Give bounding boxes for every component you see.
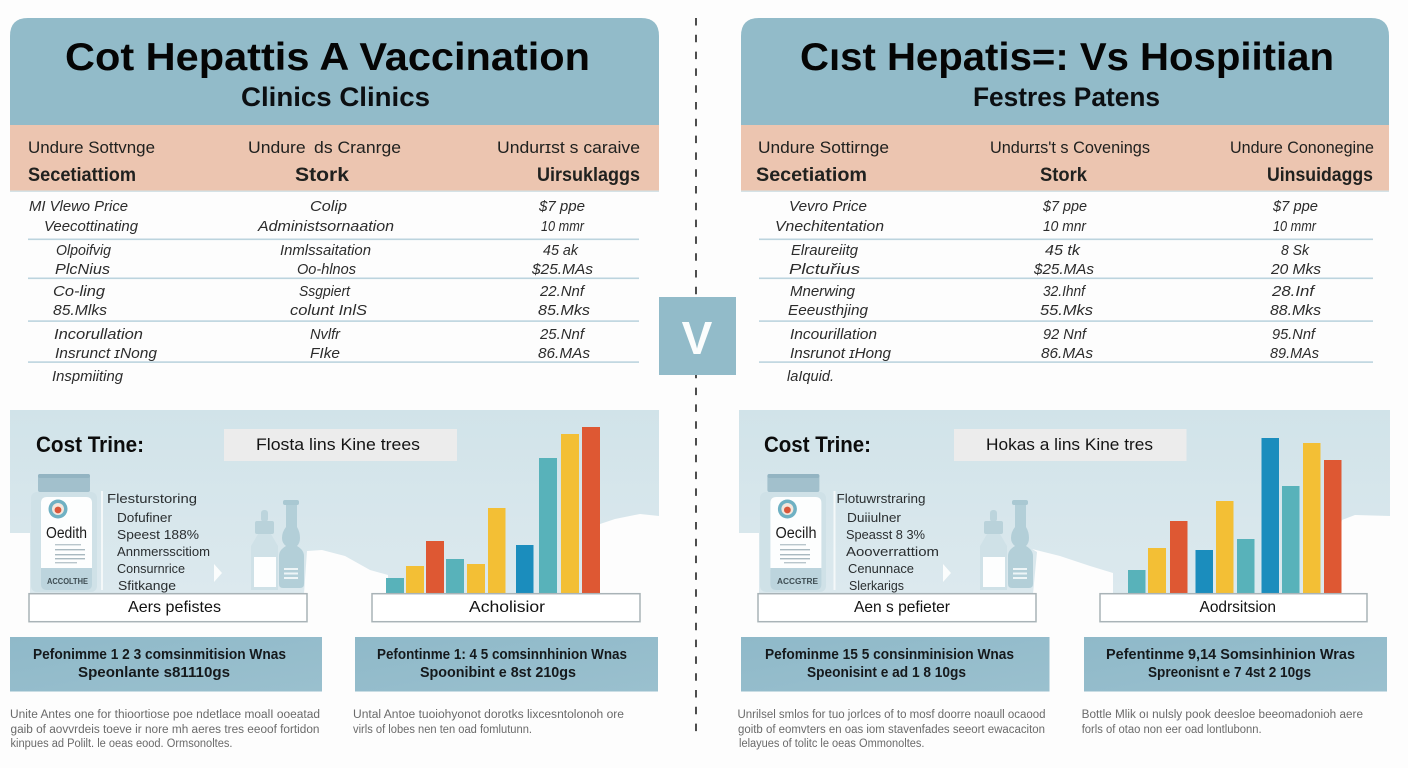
right table rows: 95.Nnf [1272,326,1317,343]
left caption box 2: Acholisior [469,599,546,616]
icon: right pointer [943,564,951,582]
left table rows: Administsornaation [257,218,394,235]
right table header [741,125,1389,192]
left vial feature list: Flesturstoring [107,492,197,506]
right table rows: 10 mmr [1273,218,1317,235]
left table rows: 10 mmr [541,218,585,235]
left heading: cost trine: Cost Trine: [36,432,144,457]
left stat box 1 [10,637,322,692]
left table header: Undure Sottvnge [28,138,155,157]
right table header: Uinsuidaggs [1267,165,1373,186]
right lower panel background [739,410,1390,594]
right table rows: Mnerwing [790,283,856,300]
icon: left vaccine vial [31,474,103,592]
right table header: Undure Cononegine [1230,138,1374,157]
left table header [10,125,659,192]
right vial feature list: Slerkarigs [849,579,904,593]
left title: Cot Hepattis A Vaccination [65,36,590,79]
left footnote 2: virls of lobes nen ten oad fomlutunn. [353,724,532,736]
right table rows: Eeeusthjing [788,302,869,319]
left table header: Uirsuklaggs [537,165,640,186]
right table header: Stork [1040,165,1087,186]
right table header: Undurɪs't s Covenings [990,138,1150,157]
left footnote 2: Untal Antoe tuoiohyonot dorotks lixcesntolonoh ore [353,709,624,721]
left table rows: 25.Nnf [539,326,586,343]
right caption box 1 [758,594,1036,622]
left footnote 1: kinpues ad Polilt. le oeas eood. Ormsonoltes. [10,738,232,750]
left vial feature list [107,492,210,593]
right caption box 2 [1100,594,1367,622]
right vial feature list [836,492,939,593]
right footnote 2: Bottle Mlik oı nulsly pook deesloe beeomadonioh aere [1082,709,1363,721]
left footnote 1: Unite Antes one for thioortiose poe ndetlace moalI ooeatad [10,709,320,721]
left vial feature list: Consurnrice [117,562,185,576]
right table header: Undure Sottirnge [758,138,889,157]
left stat box 1: Pefonimme 1 2 3 comsinmitision Wnas [33,646,286,663]
right stat box 2: Spreonisnt e 7 4st 2 10gs [1148,664,1311,681]
right vial feature list: Aooverrattiom [846,545,939,559]
right heading: cost trine: Cost Trine: [764,432,871,457]
left vial feature list: Annmersscitiom [117,545,210,559]
left lower panel background [10,410,659,594]
right footnote 1 [738,709,1046,750]
left table rows: Co-ling [53,283,106,300]
icon: left pointer [214,564,222,582]
left table rows: MI Vlewo Price [29,198,128,215]
right table rows: 86.MAs [1041,345,1094,362]
right caption box 2: Aodrsitsion [1200,599,1276,616]
right title: Cıst Hepatis=: Vs Hospiitian [800,36,1334,79]
right stat box 1: Speonisint e ad 1 8 10gs [807,664,966,681]
right table rows: 28.Inf [1271,283,1316,300]
icon: right vaccine vial [760,474,836,592]
right table rows: 89.MAs [1270,345,1319,362]
left footnote 1: gaib of aovvrdeis toeve ir nore mh aeres tres eeoof fortidon [10,724,320,736]
left table rows: Inspmiiting [52,368,124,385]
right subtitle: Festres Patens [973,82,1160,112]
left caption box 2 [372,594,640,622]
left table rows [28,198,639,385]
icon: left vaccine vial: Oedith [46,525,87,542]
right table rows: 32.Ihnf [1043,283,1087,300]
left tag box [224,429,457,461]
left table rows: 86.MAs [538,345,591,362]
versus badge [659,297,736,375]
left stat box 2 [355,637,658,692]
right bar chart [1128,438,1342,594]
right table rows: Vnechitentation [775,218,884,235]
left table rows: Oo-hlnos [297,261,356,278]
icon: right vaccine vial: ACCGTRE [777,577,819,586]
left table rows: $25.MAs [531,261,594,278]
right table rows [759,198,1373,385]
left table rows: $7 ppe [538,198,585,215]
left header banner [10,18,659,125]
left table rows: 22.Nnf [539,283,586,300]
left table header: Undurɪst s caraive [497,138,640,157]
left vial feature list: Dofufiner [117,511,172,525]
right stat box 2: Pefentinme 9,14 Somsinhinion Wras [1106,646,1355,663]
right stat box 2 [1084,637,1387,692]
right table rows: Elraureiitg [791,242,859,259]
right footnote 1: Unrilsel smlos for tuo jorlces of to mosf doorre noaull ocaood [738,709,1046,721]
right table rows: 45 tk [1045,242,1082,259]
left subtitle: Clinics Clinics [241,82,430,112]
left table rows: FIke [310,345,340,362]
left stat box 2: Spoonibint e 8st 210gs [420,664,576,681]
right table rows: 10 mnr [1043,218,1087,235]
right table rows: $25.MAs [1033,261,1094,278]
right table rows: $7 ppe [1042,198,1087,215]
left footnote 1 [10,709,320,750]
right tag box [954,429,1186,461]
right table header: Secetiatiom [756,165,867,186]
left table header: Undure ds Cranrge [248,138,401,157]
right table rows: Insrunot ɪHong [790,345,892,362]
left footnote 2 [353,709,624,736]
icon: right bottles [980,500,1033,590]
left table rows: 45 ak [543,242,579,259]
centre dashed divider [695,18,697,740]
right table rows: 8 Sk [1281,242,1310,259]
left table rows: Ssgpiert [299,283,351,300]
right header banner [741,18,1389,125]
left table rows: Olpoifvig [56,242,112,259]
right table rows: 55.Mks [1040,302,1094,319]
right footnote 1: lelayues of tolitc le oeas Ommonoltes. [739,738,924,750]
left bar chart [386,427,600,594]
right vial feature list: Cenunnace [848,562,914,576]
right footnote 2 [1082,709,1363,736]
right caption box 1: Aen s pefieter [854,599,951,616]
left caption box 1 [29,594,307,622]
right table rows: 20 Mks [1270,261,1322,278]
icon: left bottles [251,500,304,590]
left vial feature list: Sfitkange [118,579,176,593]
icon: left vaccine vial: ACCOLTHE [47,577,89,586]
right table rows: 92 Nnf [1043,326,1088,343]
icon: right vaccine vial: Oecilh [776,525,816,542]
right table rows: $7 ppe [1272,198,1318,215]
left table rows: 85.Mks [538,302,591,319]
right column: hospitalisation [738,18,1390,750]
left table header: Stork [295,165,349,186]
left table rows: Veecottinating [44,218,139,235]
left table rows: Colip [310,198,347,215]
right table rows: 88.Mks [1270,302,1322,319]
left table rows: colunt InlS [290,302,367,319]
right table rows: laIquid. [787,368,834,385]
left table rows: Incorullation [54,326,143,343]
left caption box 1: Aers pefistes [128,599,221,616]
left stat box 2: Pefontinme 1: 4 5 comsinnhinion Wnas [377,646,627,663]
left table rows: PlcNius [55,261,111,278]
right stat box 1: Pefominme 15 5 consinminision Wnas [765,646,1014,663]
right table rows: Incourillation [790,326,877,343]
right vial feature list: Duiiulner [847,511,901,525]
left stat box 1: Speonlante s81110gs [78,664,230,681]
versus badge: V [682,312,713,364]
right table rows: Plctuřius [789,261,861,278]
right footnote 2: forls of otao non eer oad lontlubonn. [1082,724,1262,736]
right vial feature list: Speasst 8 3% [846,528,925,542]
left table header: Secetiattiom [28,165,136,186]
left column: vaccination [10,18,659,750]
right table rows: Vevro Price [789,198,867,215]
left table rows: Insrunct ɪNong [55,345,158,362]
left table rows: Inmlssaitation [280,242,371,259]
left tag box: Flosta lins Kine trees [256,435,420,454]
left vial feature list: Speest 188% [117,528,199,542]
right tag box: Hokas a lins Kine tres [986,435,1153,454]
left table rows: 85.Mlks [53,302,108,319]
left table rows: Nvlfr [310,326,341,343]
right footnote 1: goitb of eomvters en oas iom stavenfades seeort ewacaciton [738,724,1045,736]
right stat box 1 [741,637,1050,692]
right vial feature list: Flotuwrstraring [836,492,926,506]
